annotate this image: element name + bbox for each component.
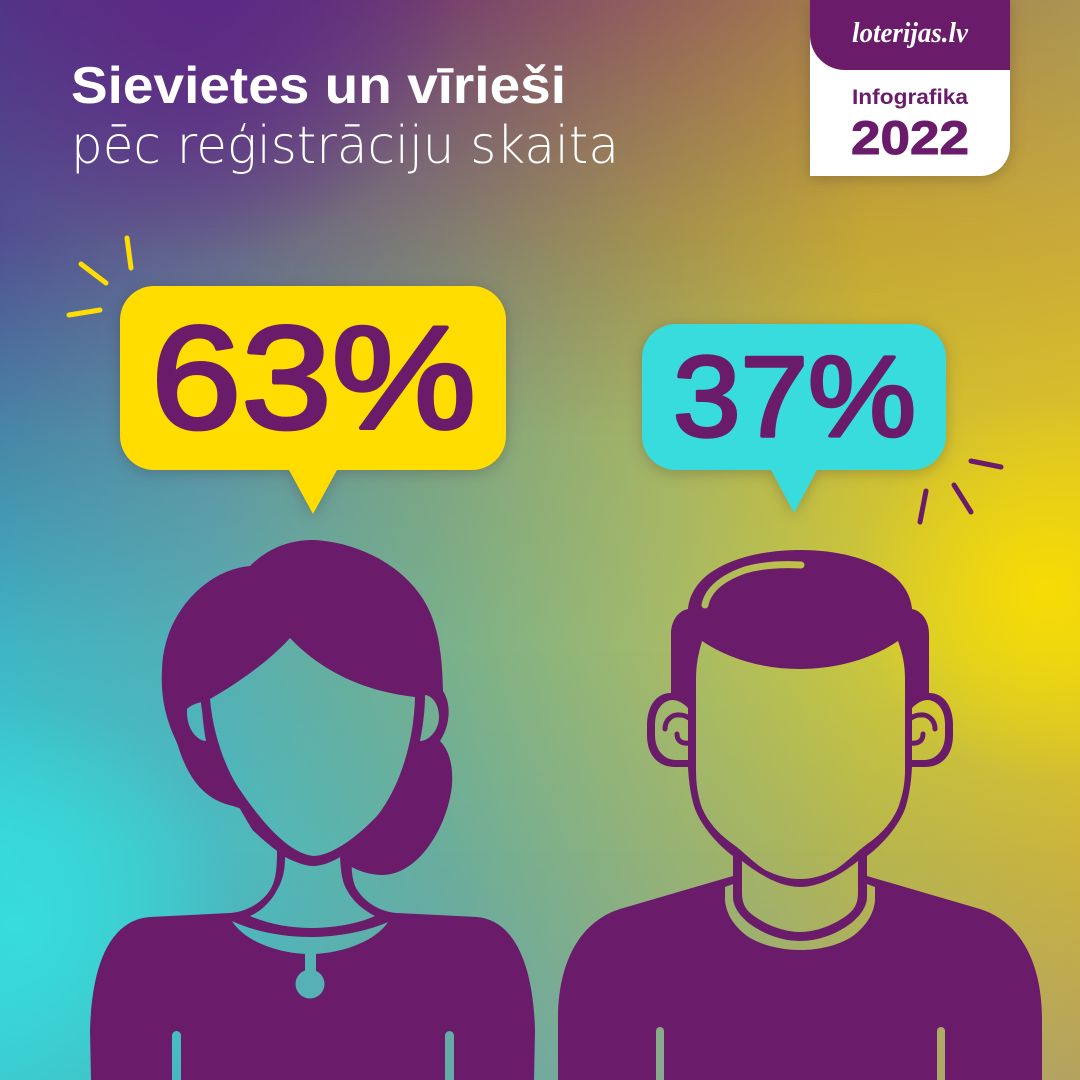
value 63%: 63% (151, 296, 476, 459)
value 37%: 37% (673, 334, 916, 461)
badge year: 2022 (851, 111, 969, 164)
icon: rays yellow (69, 238, 131, 315)
badge label: Infografika (852, 86, 968, 109)
heading line 2: pēc reģistrāciju skaita (71, 116, 619, 176)
icon: man figure (558, 550, 1042, 1080)
title (71, 57, 619, 176)
logo panel (810, 0, 1010, 70)
badge: loterijas.lv infografika 2022 (810, 0, 1010, 176)
callout: men 37% (642, 324, 946, 513)
icon: rays purple (920, 461, 1001, 522)
icon: woman figure (90, 540, 535, 1080)
logo text: loterijas.lv (852, 17, 969, 49)
heading line 1: Sievietes un vīrieši (71, 57, 566, 115)
callout: women 63% (120, 286, 506, 514)
